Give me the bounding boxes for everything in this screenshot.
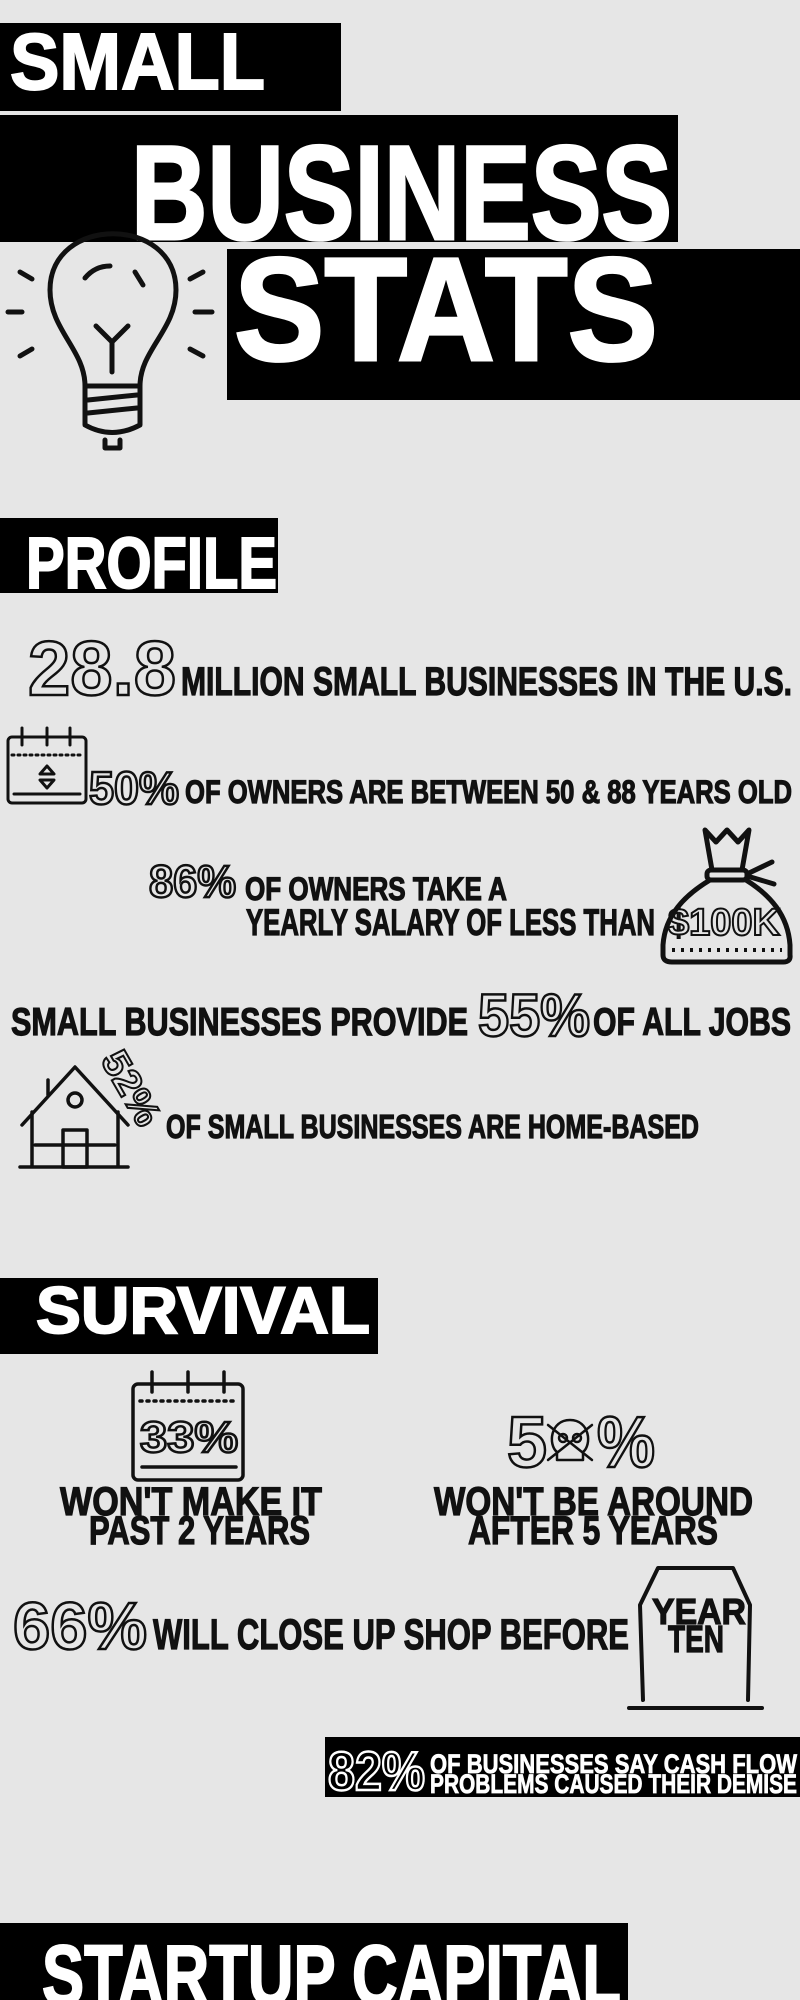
title: STATS: STATS [234,228,658,392]
icon: skull [548,1420,592,1460]
stat: 66% year ten: WILL CLOSE UP SHOP BEFORE [153,1611,629,1659]
title: BUSINESS: BUSINESS [131,119,672,268]
stat: 52% home-based: 52% [92,1044,169,1134]
icon: light bulb [8,234,212,448]
stat: 28.8 million: 28.8 [28,626,176,712]
stat: 50% owners age: 50% [89,762,179,814]
stat: 52% home-based [20,1044,699,1167]
icon: calendar 33% [133,1372,243,1480]
stat: 55% jobs: 55% [478,982,590,1049]
stat: 50% 5 years: AFTER 5 YEARS [468,1509,718,1553]
stat: 33% 2 years [60,1372,322,1553]
stat: 86% salary: 86% [149,856,236,907]
stat: 33% 2 years: PAST 2 YEARS [89,1509,310,1553]
stat: 50% 5 years [434,1403,753,1553]
stat: 55% jobs [11,982,791,1049]
heading: STARTUP CAPITAL [0,1923,628,2000]
stat: 66% year ten [13,1568,762,1708]
title: SMALL: SMALL [10,17,265,106]
title: BUSINESS [0,115,678,268]
heading: SURVIVAL: SURVIVAL [36,1273,370,1347]
icon: gravestone: YEAR [652,1591,746,1632]
stat: 86% salary: OF OWNERS TAKE A [245,871,507,907]
icon: calendar [8,728,86,803]
stat: 86% salary [149,830,790,962]
stat: 33% 2 years: 33% [140,1413,238,1462]
stat: 55% jobs: SMALL BUSINESSES PROVIDE [11,1001,468,1044]
stat: 66% year ten: 66% [13,1589,147,1664]
heading: PROFILE: PROFILE [26,524,277,604]
icon: money bag [663,830,790,962]
stat: 28.8 million [28,626,792,712]
icon: gravestone: TEN [668,1619,724,1661]
stat: 33% 2 years: WON'T MAKE IT [60,1480,322,1524]
icon: money bag: $100K [668,902,781,944]
callout: 82% cash flow: 82% [328,1740,425,1802]
stat: 50% owners age [8,728,792,814]
callout: 82% cash flow [325,1737,800,1802]
icon: gravestone [629,1568,762,1708]
icon: house [20,1067,128,1167]
stat: 50% 5 years: % [597,1403,655,1483]
stat: 50% 5 years: 5 [507,1403,547,1483]
